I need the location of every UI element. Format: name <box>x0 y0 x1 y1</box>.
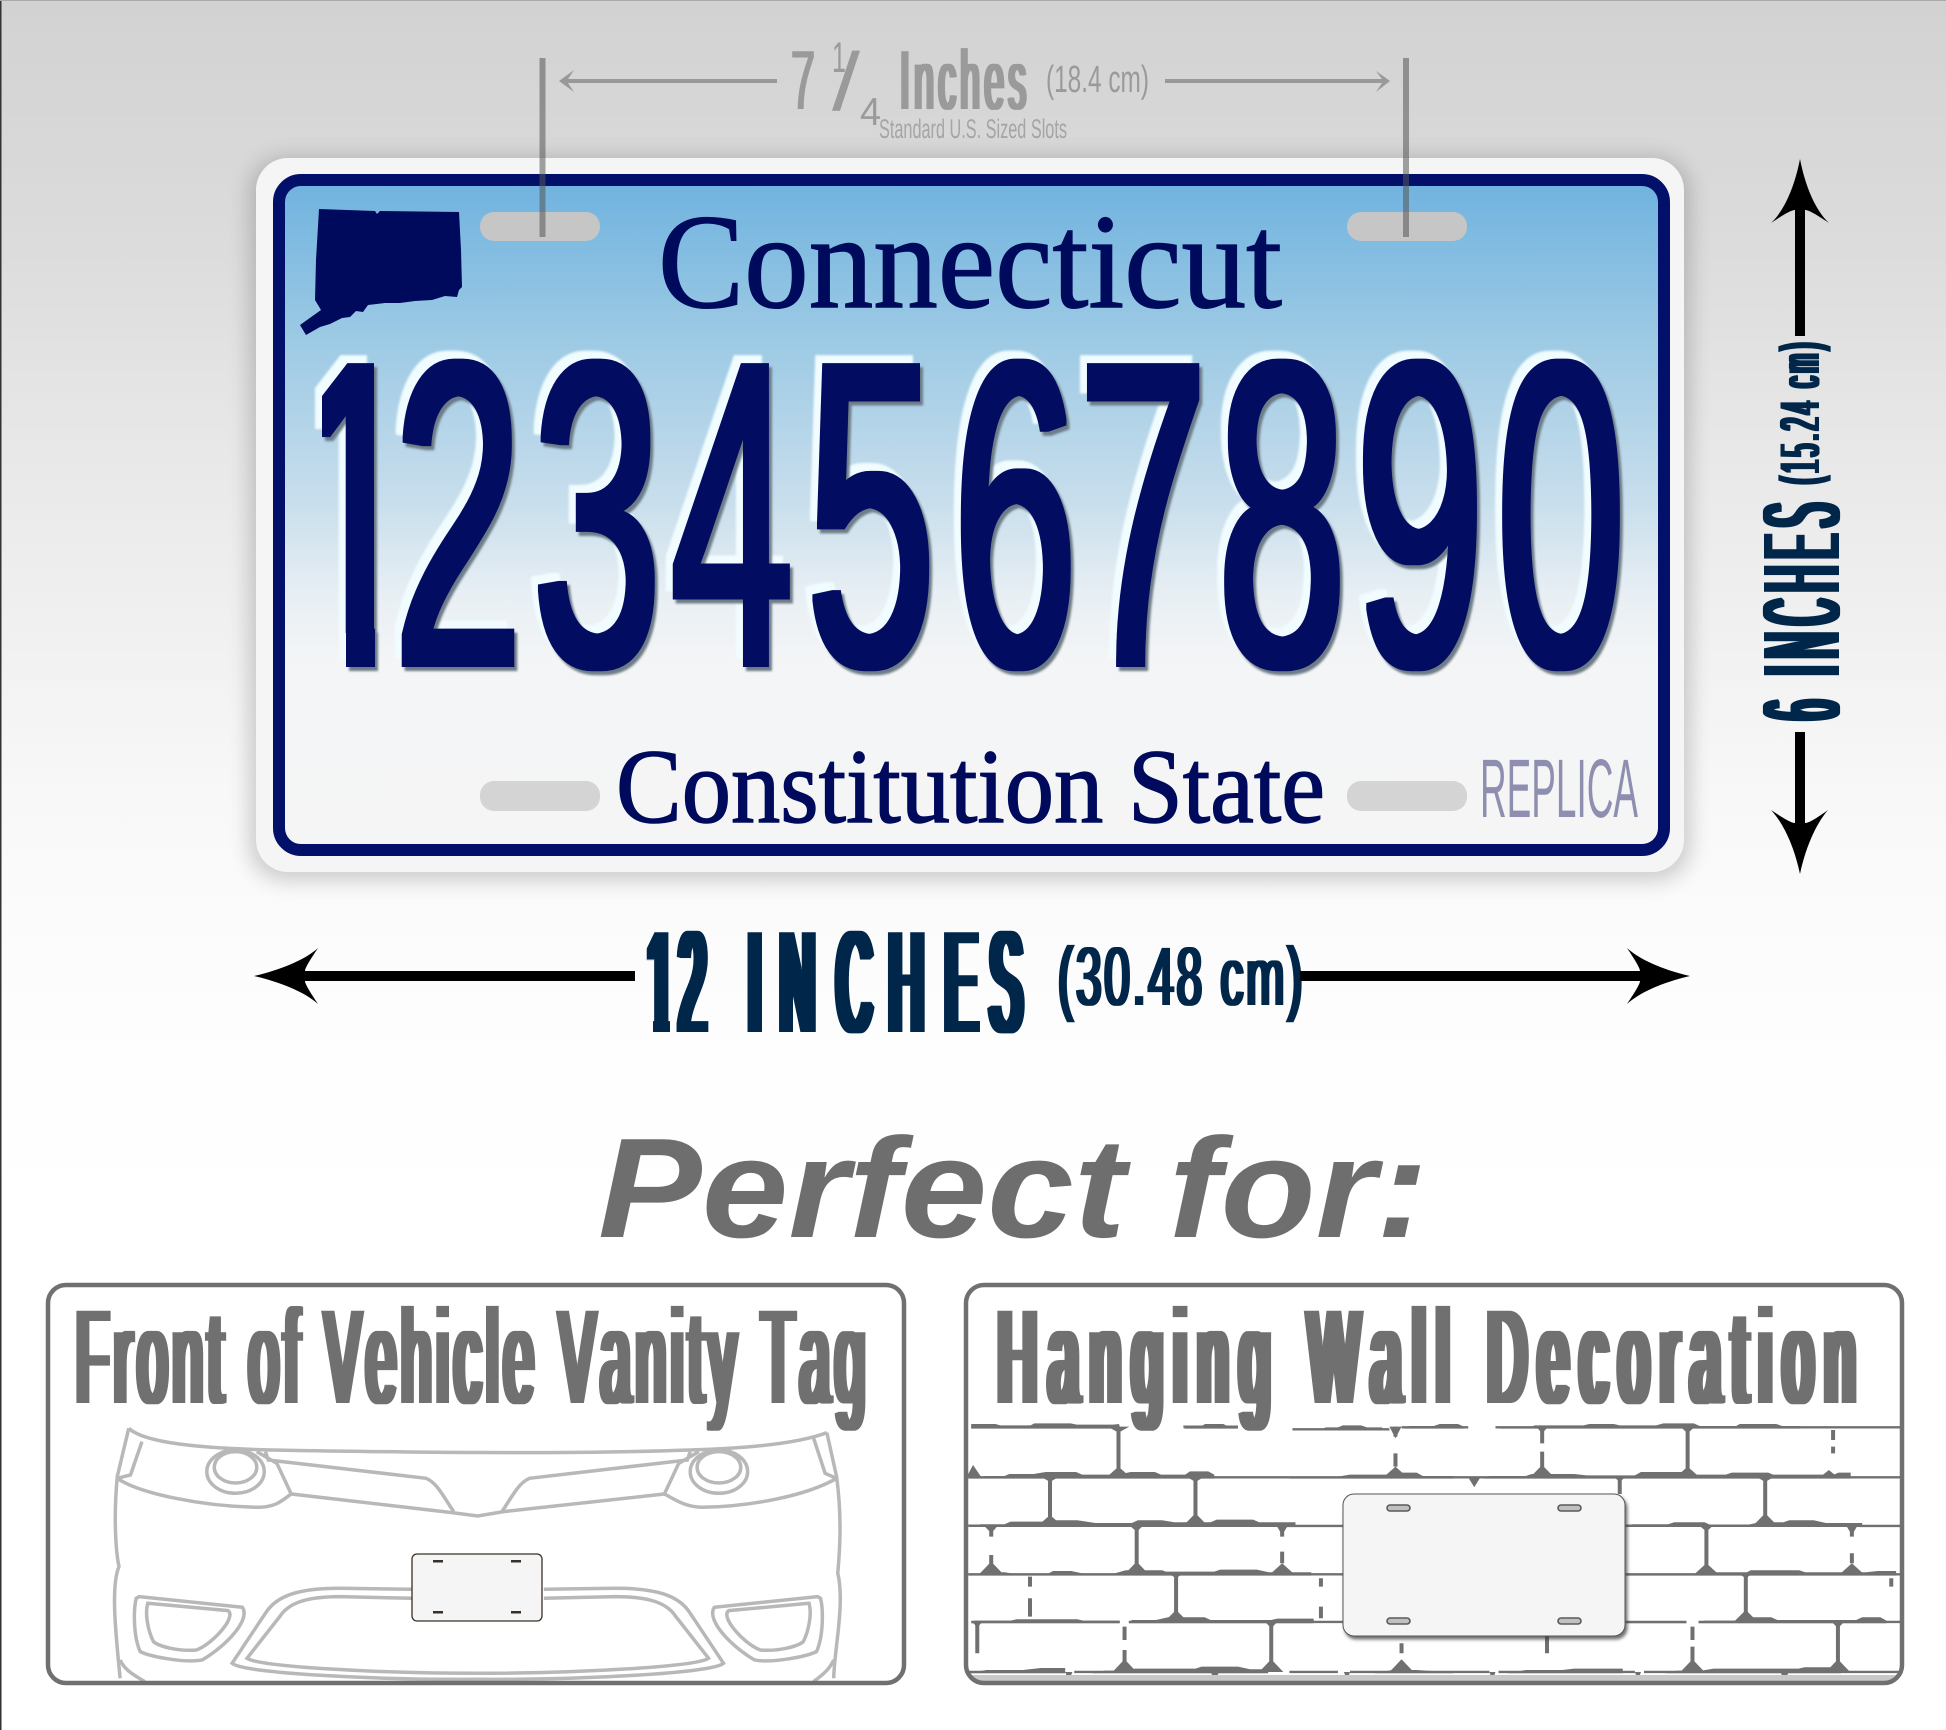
arrow left <box>559 70 777 92</box>
panel border <box>48 1285 904 1683</box>
plate number 1234567890: 8 <box>1218 272 1346 756</box>
measurement text: (18.4 cm) <box>1046 59 1149 101</box>
panel title: Hanging Wall Decoration <box>998 1283 1867 1432</box>
plate number 1234567890: 1 <box>292 272 420 756</box>
slot guide line left <box>540 58 546 237</box>
car front line drawing <box>115 1428 840 1682</box>
brick wall <box>966 1423 1902 1683</box>
plate white base <box>256 158 1684 872</box>
plate number 1234567890: 3 <box>533 272 661 756</box>
arrow right <box>1165 71 1390 92</box>
measurement text: Inches <box>900 33 1030 127</box>
slot note: Standard U.S. Sized Slots <box>879 114 1067 144</box>
metric label: (30.48 cm) <box>1058 930 1305 1023</box>
wall bottom edge shading <box>972 1675 1896 1681</box>
measurement label: 6 INCHES <box>1741 496 1863 720</box>
slot guide line right <box>1403 58 1409 237</box>
measurement text <box>791 33 1149 134</box>
measurement label: 12 INCHES <box>647 901 1022 1063</box>
state name: Connecticut <box>658 188 1282 337</box>
arrow left <box>254 948 635 1004</box>
mounting slot bottom right <box>1347 781 1467 811</box>
mounting slot top left <box>480 212 600 241</box>
measurement text: 4 <box>860 91 881 134</box>
arrow down <box>1771 732 1828 874</box>
license plate: REPLICA <box>1480 742 1638 835</box>
metric label: (15.24 cm) <box>1768 339 1831 484</box>
plate number 1234567890 <box>314 350 1624 677</box>
panel: front of vehicle <box>48 1283 904 1683</box>
height dimension: 6 inches <box>1741 159 1863 874</box>
state slogan: Constitution State <box>616 728 1325 845</box>
measurement text: / <box>832 37 860 128</box>
plate number 1234567890: 9 <box>1356 272 1484 756</box>
plate number 1234567890: 4 <box>672 272 792 756</box>
measurement text: 7 <box>791 33 815 127</box>
blank plate on wall <box>1343 1494 1625 1636</box>
icon: Connecticut state silhouette <box>300 209 462 335</box>
heading: Perfect for: Perfect for: <box>598 1109 1428 1268</box>
width dimension: 12 inches <box>254 901 1690 1063</box>
mounting slot top right <box>1347 212 1467 241</box>
plate shadow <box>250 158 1690 880</box>
panel background <box>48 1285 904 1683</box>
panel title: Front of Vehicle Vanity Tag <box>76 1283 870 1432</box>
slot spacing dimension: 7 1/4 inches <box>540 33 1409 237</box>
plate number 1234567890: 0 <box>1497 272 1625 756</box>
plate number 1234567890: 5 <box>807 272 935 756</box>
plate blue sky field with navy border <box>279 180 1664 850</box>
license plate <box>250 158 1690 880</box>
plate number 1234567890: 7 <box>1079 272 1207 756</box>
mounting slot bottom left <box>480 781 600 811</box>
arrow up <box>1771 159 1829 336</box>
arrow right <box>1300 948 1690 1004</box>
small blank plate on car <box>412 1554 542 1621</box>
panel background <box>966 1285 1902 1683</box>
plate number 1234567890: 6 <box>954 272 1076 756</box>
panel border <box>966 1285 1902 1683</box>
measurement text: 1 <box>832 34 846 82</box>
panel: hanging wall decoration <box>966 1283 1902 1683</box>
plate number 1234567890: 2 <box>394 272 522 756</box>
